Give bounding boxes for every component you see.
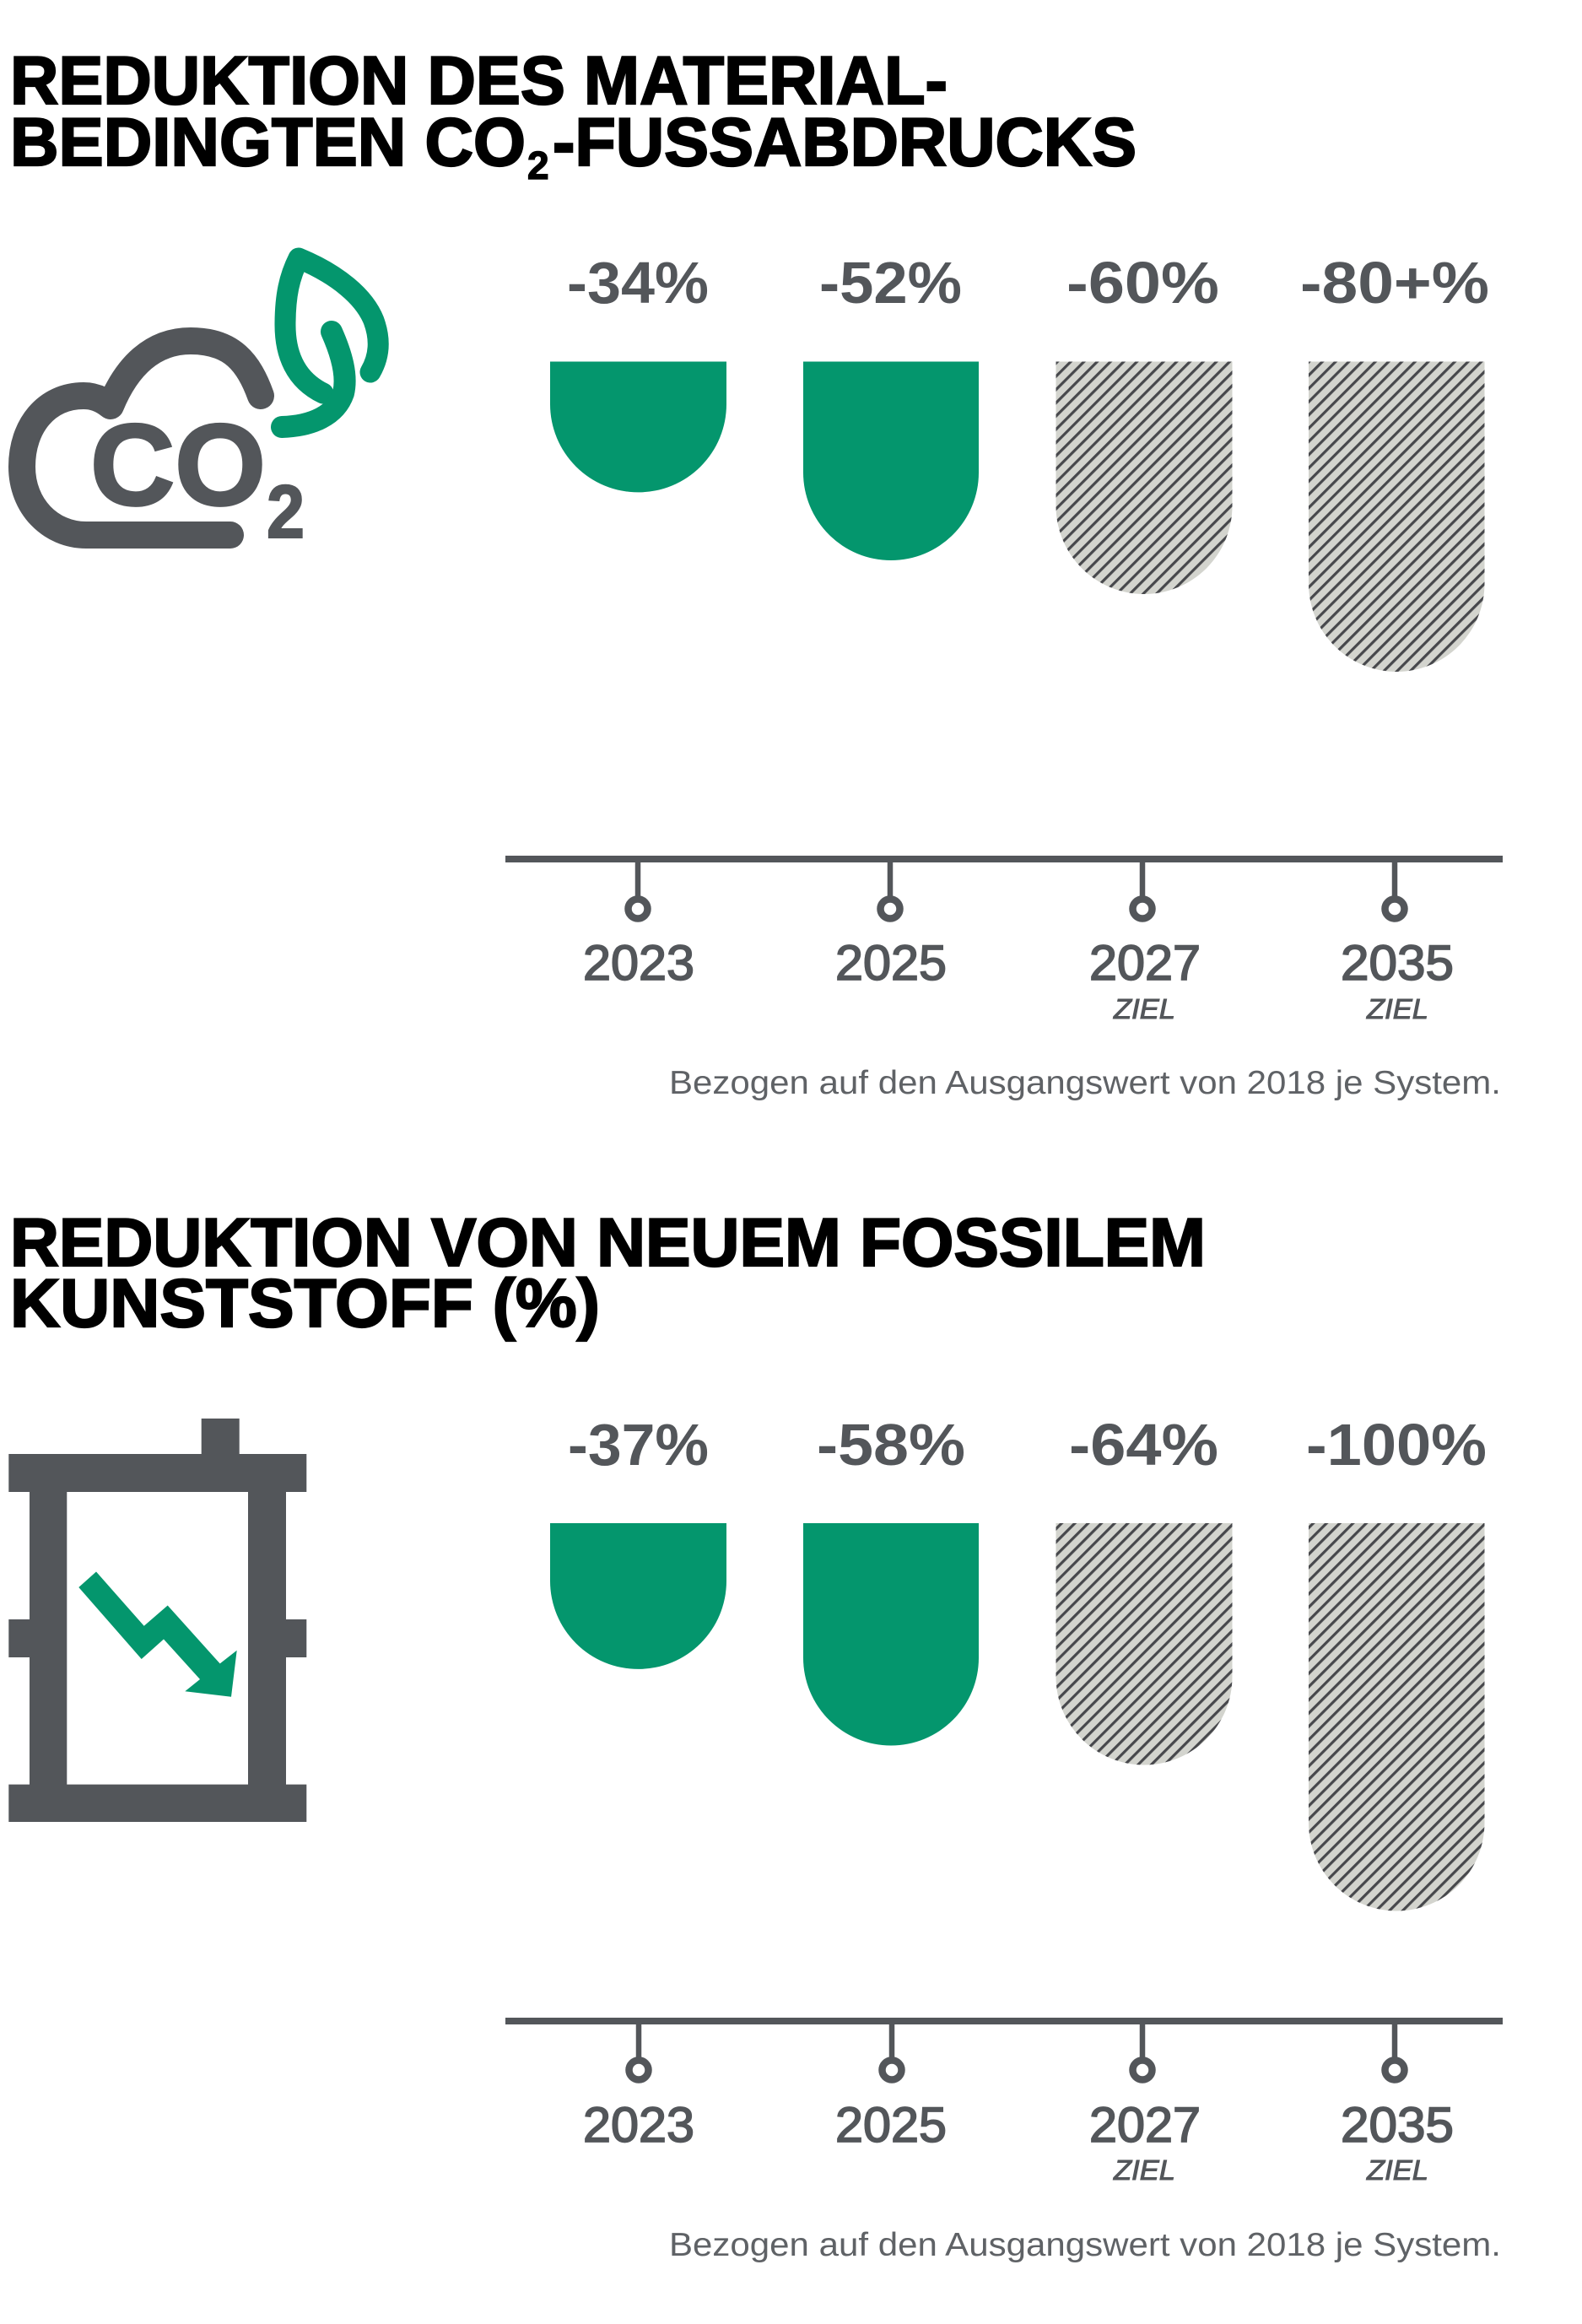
year labels: ZIEL: [1366, 2154, 1428, 2186]
year labels: 2023: [583, 2098, 694, 2153]
year labels: 2023: [583, 936, 694, 991]
bar chart: CO2 reductions: [550, 361, 1485, 672]
year labels: [583, 2098, 1454, 2186]
heading: CO2 footprint: 2: [527, 143, 549, 187]
panel: fossil plastic reduction: [8, 1205, 1503, 2263]
year labels: ZIEL: [1113, 993, 1175, 1024]
value labels: [567, 250, 1489, 316]
heading: fossil plastic: KUNSTSTOFF (%): [10, 1266, 600, 1342]
icon: CO2 cloud with leaf: 2: [267, 469, 305, 554]
footnote: Bezogen auf den Ausgangswert von 2018 je System.: [669, 2227, 1501, 2263]
heading: CO2 footprint: [10, 43, 1137, 187]
year labels: ZIEL: [1113, 2154, 1175, 2186]
year labels: ZIEL: [1366, 993, 1428, 1024]
value labels: [568, 1412, 1487, 1478]
value labels: -64%: [1069, 1412, 1218, 1478]
icon: oil barrel with falling arrow: [8, 1419, 306, 1822]
panel: CO2 footprint reduction: [10, 43, 1503, 1101]
value labels: -58%: [817, 1412, 965, 1478]
value labels: -100%: [1306, 1412, 1487, 1478]
heading: CO2 footprint: REDUKTION DES MATERIAL-: [10, 43, 948, 119]
bar chart: fossil plastic reductions: [550, 1523, 1485, 1911]
year labels: 2027: [1089, 936, 1201, 991]
heading: CO2 footprint: BEDINGTEN CO: [10, 105, 526, 181]
heading: CO2 footprint: -FUSSABDRUCKS: [553, 105, 1137, 181]
heading: fossil plastic: [10, 1205, 1206, 1342]
value labels: -60%: [1066, 250, 1219, 316]
timeline axis: [505, 2018, 1503, 2079]
value labels: -37%: [568, 1412, 709, 1478]
year labels: 2025: [835, 936, 947, 991]
year labels: 2035: [1341, 936, 1454, 991]
year labels: 2027: [1089, 2098, 1201, 2153]
year labels: 2025: [835, 2098, 947, 2153]
year labels: [583, 936, 1454, 1024]
value labels: -52%: [819, 250, 962, 316]
heading: fossil plastic: REDUKTION VON NEUEM FOSSILEM: [10, 1205, 1206, 1281]
icon: CO2 cloud with leaf: [22, 258, 378, 554]
timeline axis: [505, 856, 1503, 918]
value labels: -34%: [567, 250, 709, 316]
year labels: 2035: [1341, 2098, 1454, 2153]
footnote: Bezogen auf den Ausgangswert von 2018 je System.: [669, 1065, 1501, 1101]
value labels: -80+%: [1300, 250, 1489, 316]
icon: CO2 cloud with leaf: CO: [90, 401, 266, 530]
